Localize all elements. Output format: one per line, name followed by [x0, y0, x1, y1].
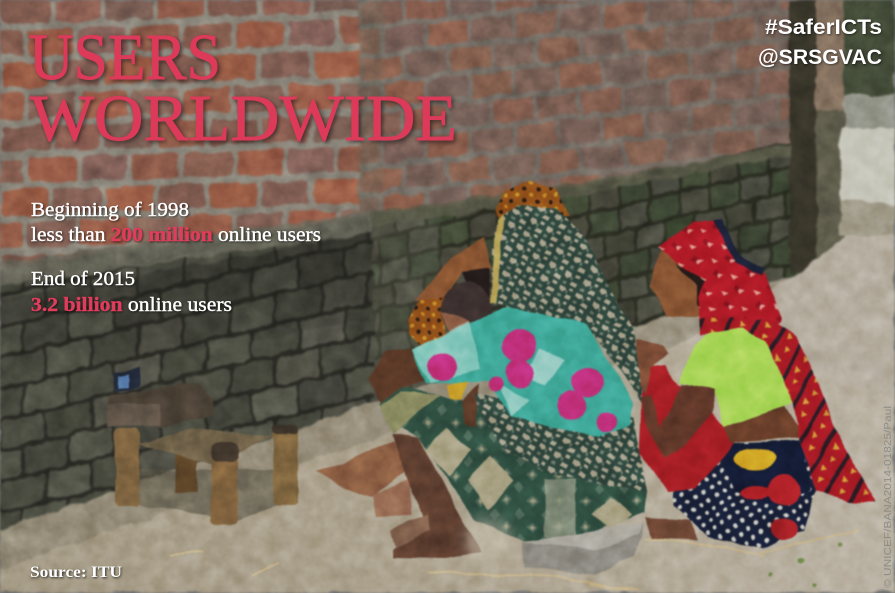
front woman: arm	[369, 349, 425, 402]
source: Source: ITU	[30, 564, 122, 581]
shirt light patches	[411, 322, 565, 417]
seat	[137, 428, 273, 464]
lower wall: ledge	[0, 212, 372, 286]
camera	[113, 368, 140, 393]
corner block bricks	[372, 205, 440, 402]
pillar	[790, 0, 818, 272]
back leg	[175, 450, 197, 492]
2015 heading: End of 2015	[31, 269, 135, 290]
photo credit: © UNICEF/BANA2014-01825/Paul	[882, 406, 894, 588]
ground shadow along wall	[0, 268, 820, 570]
lower wall: dark band	[0, 232, 376, 380]
red head scarf	[657, 220, 783, 330]
left leg	[115, 428, 140, 507]
stool with camera	[108, 368, 298, 524]
lower wall: grey brick, left	[0, 215, 376, 530]
right woman: midriff	[722, 405, 804, 442]
right woman: face	[650, 250, 708, 318]
front woman: leg and foot	[391, 433, 482, 559]
skirt cream motifs	[381, 392, 632, 538]
right leg	[272, 427, 298, 506]
back woman: orange sari	[408, 296, 447, 347]
straw on ground	[170, 530, 860, 590]
ground	[0, 230, 895, 593]
brick corner column	[358, 0, 382, 320]
2015 value: 3.2 billion online users	[31, 295, 232, 316]
title	[29, 21, 457, 155]
title line one: USERS	[29, 21, 221, 94]
back woman: orange headscarf	[495, 182, 570, 222]
right woman: navy skirt	[674, 440, 817, 547]
back woman: raised arm	[415, 236, 492, 302]
lower wall: grey-green brick, right	[372, 140, 804, 402]
title line two: WORLDWIDE	[30, 82, 457, 155]
upper wall: red brick, left section	[0, 0, 372, 275]
back woman: legs	[315, 438, 406, 497]
stool shadow	[125, 470, 290, 520]
teal shirt	[411, 307, 633, 437]
wrap along back	[700, 318, 876, 502]
right woman: lime blouse	[681, 323, 792, 428]
child head	[442, 281, 492, 335]
right woman: arm	[643, 385, 715, 458]
front woman: arm over shirt	[462, 385, 480, 428]
far wall and window	[844, 0, 895, 96]
handle: @SRSGVAC	[758, 46, 882, 69]
shirt flowers	[428, 329, 617, 433]
people	[170, 182, 876, 590]
1998 value: less than 200 million online users	[31, 225, 321, 246]
lower scarf	[476, 395, 647, 492]
hashtag: #SaferICTs	[765, 16, 882, 39]
hashtag and handle	[758, 16, 882, 69]
statistics	[31, 200, 321, 316]
ledge on the right	[372, 142, 802, 226]
skirt flowers	[733, 448, 801, 540]
front leg	[211, 443, 238, 524]
1998 heading: Beginning of 1998	[31, 200, 189, 221]
right woman: red cloth	[640, 365, 735, 492]
skirt dark panel	[715, 440, 812, 505]
green headscarf	[491, 205, 643, 403]
foot haze	[464, 518, 512, 562]
brick slab	[522, 523, 643, 575]
right woman: foot	[645, 518, 698, 540]
upper wall: red brick, right section	[360, 0, 795, 225]
green specks	[768, 543, 842, 587]
top plank	[108, 383, 214, 428]
front woman: yellow lining	[445, 380, 470, 403]
front woman: skirt	[380, 387, 647, 542]
